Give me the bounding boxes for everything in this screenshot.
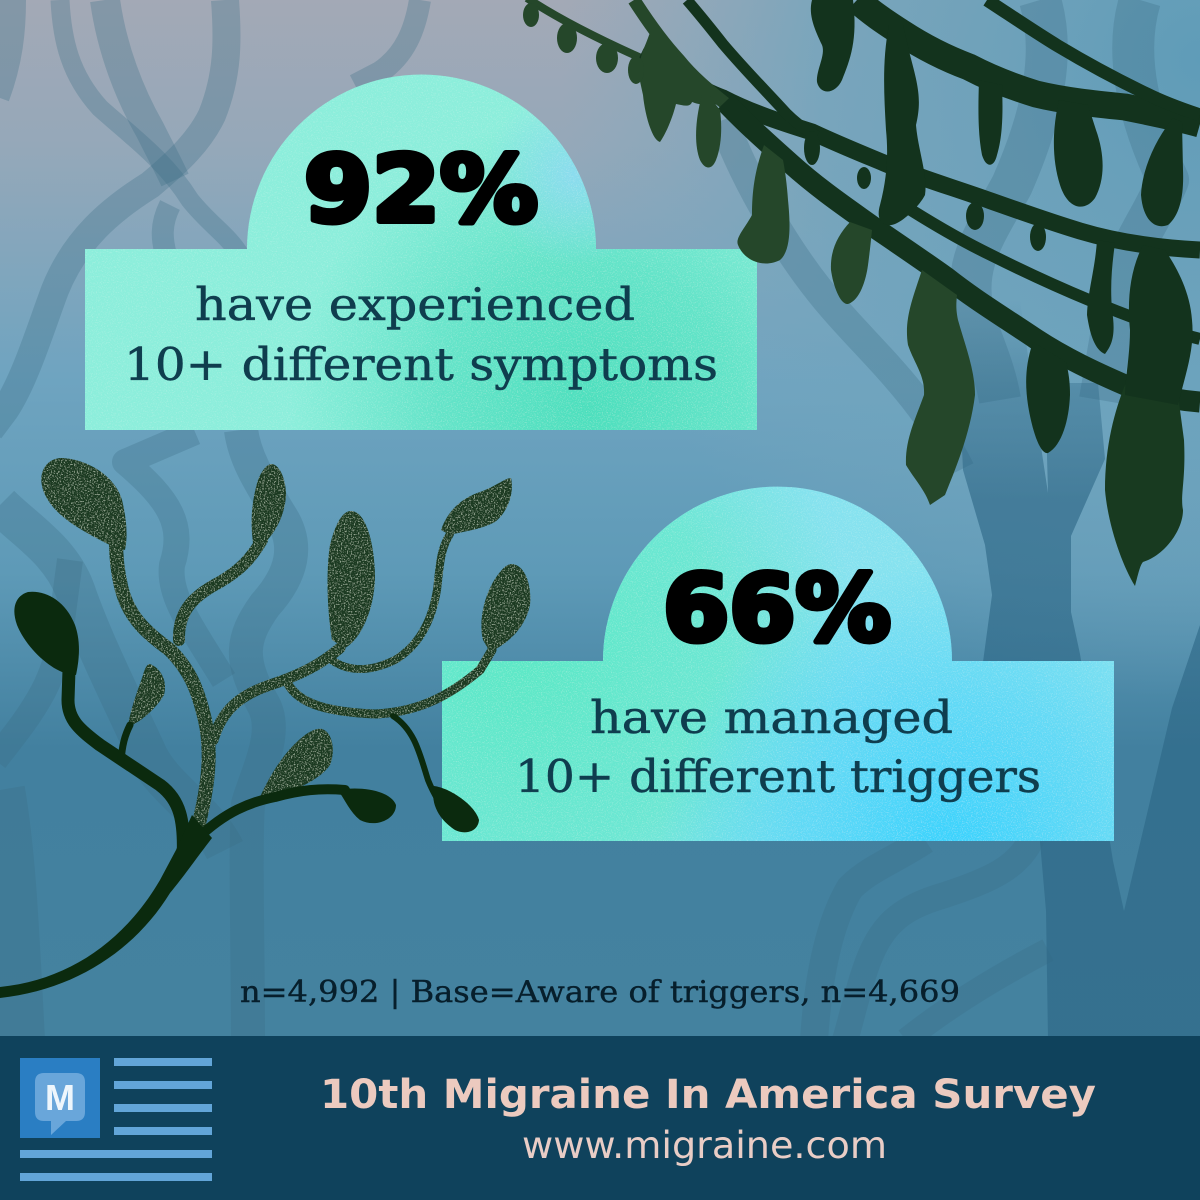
logo: flag with Migraine speech bubble: M: [45, 1077, 75, 1118]
footer url: www.migraine.com: [522, 1124, 887, 1167]
card 2 shape: [442, 487, 1114, 841]
text: have managed 10+ different triggers: [515, 691, 1041, 803]
card 1 shape: [85, 75, 757, 430]
vine branches: [527, 0, 1200, 402]
footer band: [0, 1036, 1200, 1200]
plant dark stems and leaves: [0, 592, 479, 998]
footer title: 10th Migraine In America Survey: [320, 1072, 1096, 1118]
stat: 92%: 92%: [304, 136, 538, 243]
plant speckled branches and leaves: [41, 458, 530, 840]
vine leaves lighter: [523, 3, 975, 505]
text: have experienced 10+ different symptoms: [124, 278, 718, 391]
panel: 66% stat card: [442, 487, 1114, 841]
text: have experienced 10+ different symptoms: have experienced: [195, 278, 635, 331]
logo: flag with Migraine speech bubble: [20, 1058, 212, 1181]
illustration: hanging vines top right: [523, 0, 1200, 586]
panel: 92% stat card: [85, 75, 757, 430]
background trunk silhouette: [955, 300, 1200, 1040]
illustration: plant lower left: [0, 458, 530, 998]
footnote: sample sizes: n=4,992 | Base=Aware of triggers, n=4,669: [240, 975, 960, 1010]
text: have experienced 10+ different symptoms: 10+ different symptoms: [124, 338, 718, 391]
vine leaves darker: [804, 0, 1193, 586]
text: have managed 10+ different triggers: 10+ different triggers: [515, 750, 1041, 803]
text: have managed 10+ different triggers: have managed: [590, 691, 953, 744]
stat: 66%: 66%: [663, 555, 891, 662]
